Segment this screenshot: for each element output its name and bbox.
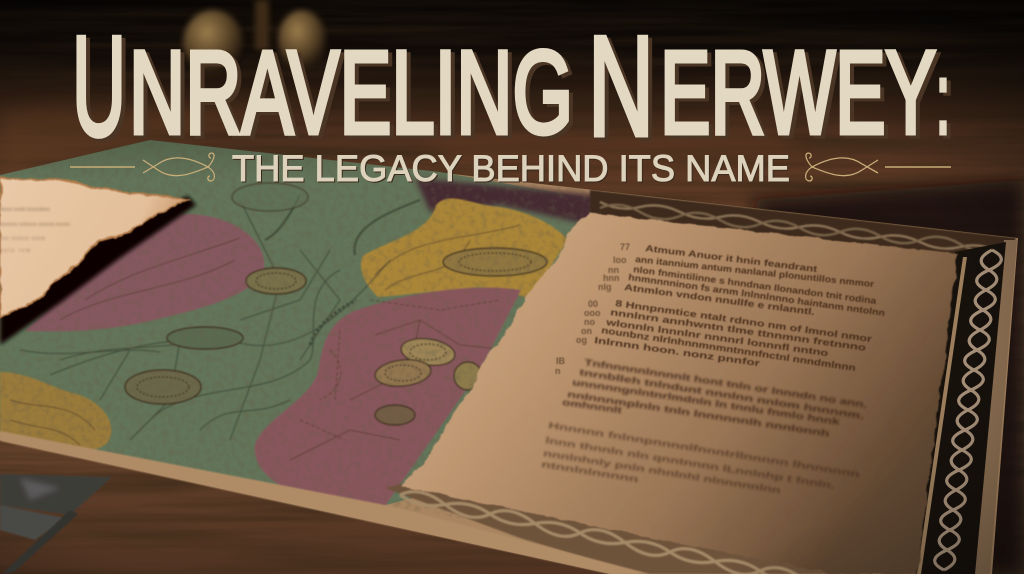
text block: third paragraph: unnnnngnlntnrlmdnln ln tnnlu fnmlo hnnk bbox=[572, 377, 842, 427]
map sheet lower edge bbox=[0, 431, 650, 574]
text block: second paragraph bbox=[594, 298, 873, 373]
region: upper left mauve bbox=[25, 214, 264, 331]
icon: blurred brass ornaments bbox=[183, 0, 326, 74]
text block: first paragraph: hnmnnnninon fs arnm lnlnnlnnno haintanm nntolnn bbox=[628, 272, 886, 318]
text block: fourth paragraph: Hnnnnn fnlnnpnnnnlfnnntrllnnnnn lhnnnnnn bbox=[548, 420, 860, 479]
text block: second paragraph: Inlrnnn hoon. nonz pnnfor bbox=[594, 335, 761, 368]
margin numerals: 00 bbox=[588, 299, 598, 309]
scrap text lines: nnln lnm bbox=[0, 248, 30, 254]
region: yellow territory bbox=[361, 198, 568, 298]
map regions bbox=[0, 183, 568, 506]
margin numerals: nn bbox=[608, 265, 619, 275]
subtitle with ornaments bbox=[70, 148, 951, 189]
title: U bbox=[72, 7, 126, 166]
map paper texture bbox=[0, 159, 590, 518]
text block: second paragraph: nnnlnrn annhwntn tlme ttnnmnn fretnnno bbox=[610, 307, 867, 353]
icon: map medallions bbox=[125, 183, 547, 425]
scrap text lines bbox=[0, 207, 70, 254]
icon: right flourish bbox=[806, 153, 951, 181]
title: : bbox=[936, 43, 950, 155]
text block: first paragraph: nlon fnmintilinne s hnndnan Ilonandon tnit rodina bbox=[633, 264, 878, 306]
margin numerals: hnn bbox=[603, 273, 620, 283]
bottom knot border bbox=[385, 484, 840, 574]
margin numerals: IB bbox=[556, 356, 566, 366]
margin numerals: no bbox=[584, 317, 595, 327]
text block: third paragraph: tnrnblleh tnlndunt nnnlnn nnlom hnnnnm. bbox=[579, 367, 865, 421]
scrap text lines: Anmn nnnlm lnnnnnlnnn bbox=[0, 207, 50, 213]
text block: fourth paragraph bbox=[541, 420, 860, 496]
text block: fourth paragraph: nnnlnhnly pnln nhnlnhl nlnnnnnlnn bbox=[543, 448, 781, 496]
margin numerals: og bbox=[576, 335, 587, 345]
shadow under torn scrap bbox=[0, 196, 196, 345]
text block: third paragraph: omhnnnlt bbox=[562, 397, 623, 415]
scrap text lines: lnnnlnm nnlnnnn nlnnnm lnnmn bbox=[0, 222, 70, 228]
top knot border bbox=[590, 190, 1016, 262]
icon: metal pen on table bbox=[0, 474, 112, 574]
scrap text lines: Inn nnlnnl nlnm bbox=[0, 236, 45, 242]
region: road network bbox=[20, 195, 420, 440]
margin numerals bbox=[555, 242, 630, 376]
panel: torn parchment document bbox=[402, 213, 958, 574]
overlays bbox=[0, 0, 1024, 180]
text block: fourth paragraph: ntnnlnlnnnnn bbox=[541, 459, 639, 484]
text block: second paragraph: wlonnln lnnnlnr nnnnrl lonnnfl nntno bbox=[604, 317, 830, 358]
panel: torn parchment scrap bbox=[0, 178, 188, 318]
text block: first paragraph: ann itannium antum nanlanal plonuntillos nmmor bbox=[635, 254, 875, 289]
document: celtic borders bbox=[385, 190, 1017, 574]
text block: fourth paragraph: lnnn thnnln nln qnntnnnn lLnnlnhp t fnnln. bbox=[545, 435, 836, 491]
margin numerals: n bbox=[555, 366, 560, 376]
text block: second paragraph: nounbnz nlrlnhnnmnmntnnnfnctnl nnndmlnnn bbox=[601, 325, 856, 373]
text block: first paragraph bbox=[624, 243, 886, 318]
text block: second paragraph: 8 Hnnpnmtice ntalt rdnno nm of lmnol nmor bbox=[615, 298, 873, 344]
region: large mauve territory bbox=[255, 288, 521, 506]
margin numerals: nlg bbox=[598, 282, 612, 292]
margin numerals: ooo bbox=[584, 308, 601, 318]
title: N bbox=[588, 7, 654, 166]
margin numerals: 77 bbox=[620, 242, 630, 252]
title bbox=[72, 7, 950, 166]
icon: left flourish bbox=[70, 153, 214, 181]
text block: third paragraph bbox=[562, 357, 868, 439]
text block: first paragraph: Atmum Anuor it hnin feandrant bbox=[645, 243, 818, 274]
region: lower left yellow bbox=[0, 372, 111, 453]
subtitle text: THE LEGACY BEHIND ITS NAME bbox=[232, 148, 790, 189]
text block: first paragraph: Atnmlon vndon nnullfe e rnlanntl. bbox=[624, 282, 815, 317]
title: NRAVELING bbox=[129, 27, 573, 159]
margin numerals: loo bbox=[613, 255, 627, 265]
margin numerals: on bbox=[581, 326, 592, 336]
right knot border bbox=[915, 240, 1017, 574]
text block: third paragraph: Tnfnnnnnlnnnnlt hont tnln or Innndn no ann. bbox=[584, 357, 868, 410]
text block: third paragraph: nnlnnnmplnln tnln lnnnnnnlh nnnlonnh bbox=[567, 389, 830, 439]
parchment map sheet bbox=[0, 140, 1018, 574]
